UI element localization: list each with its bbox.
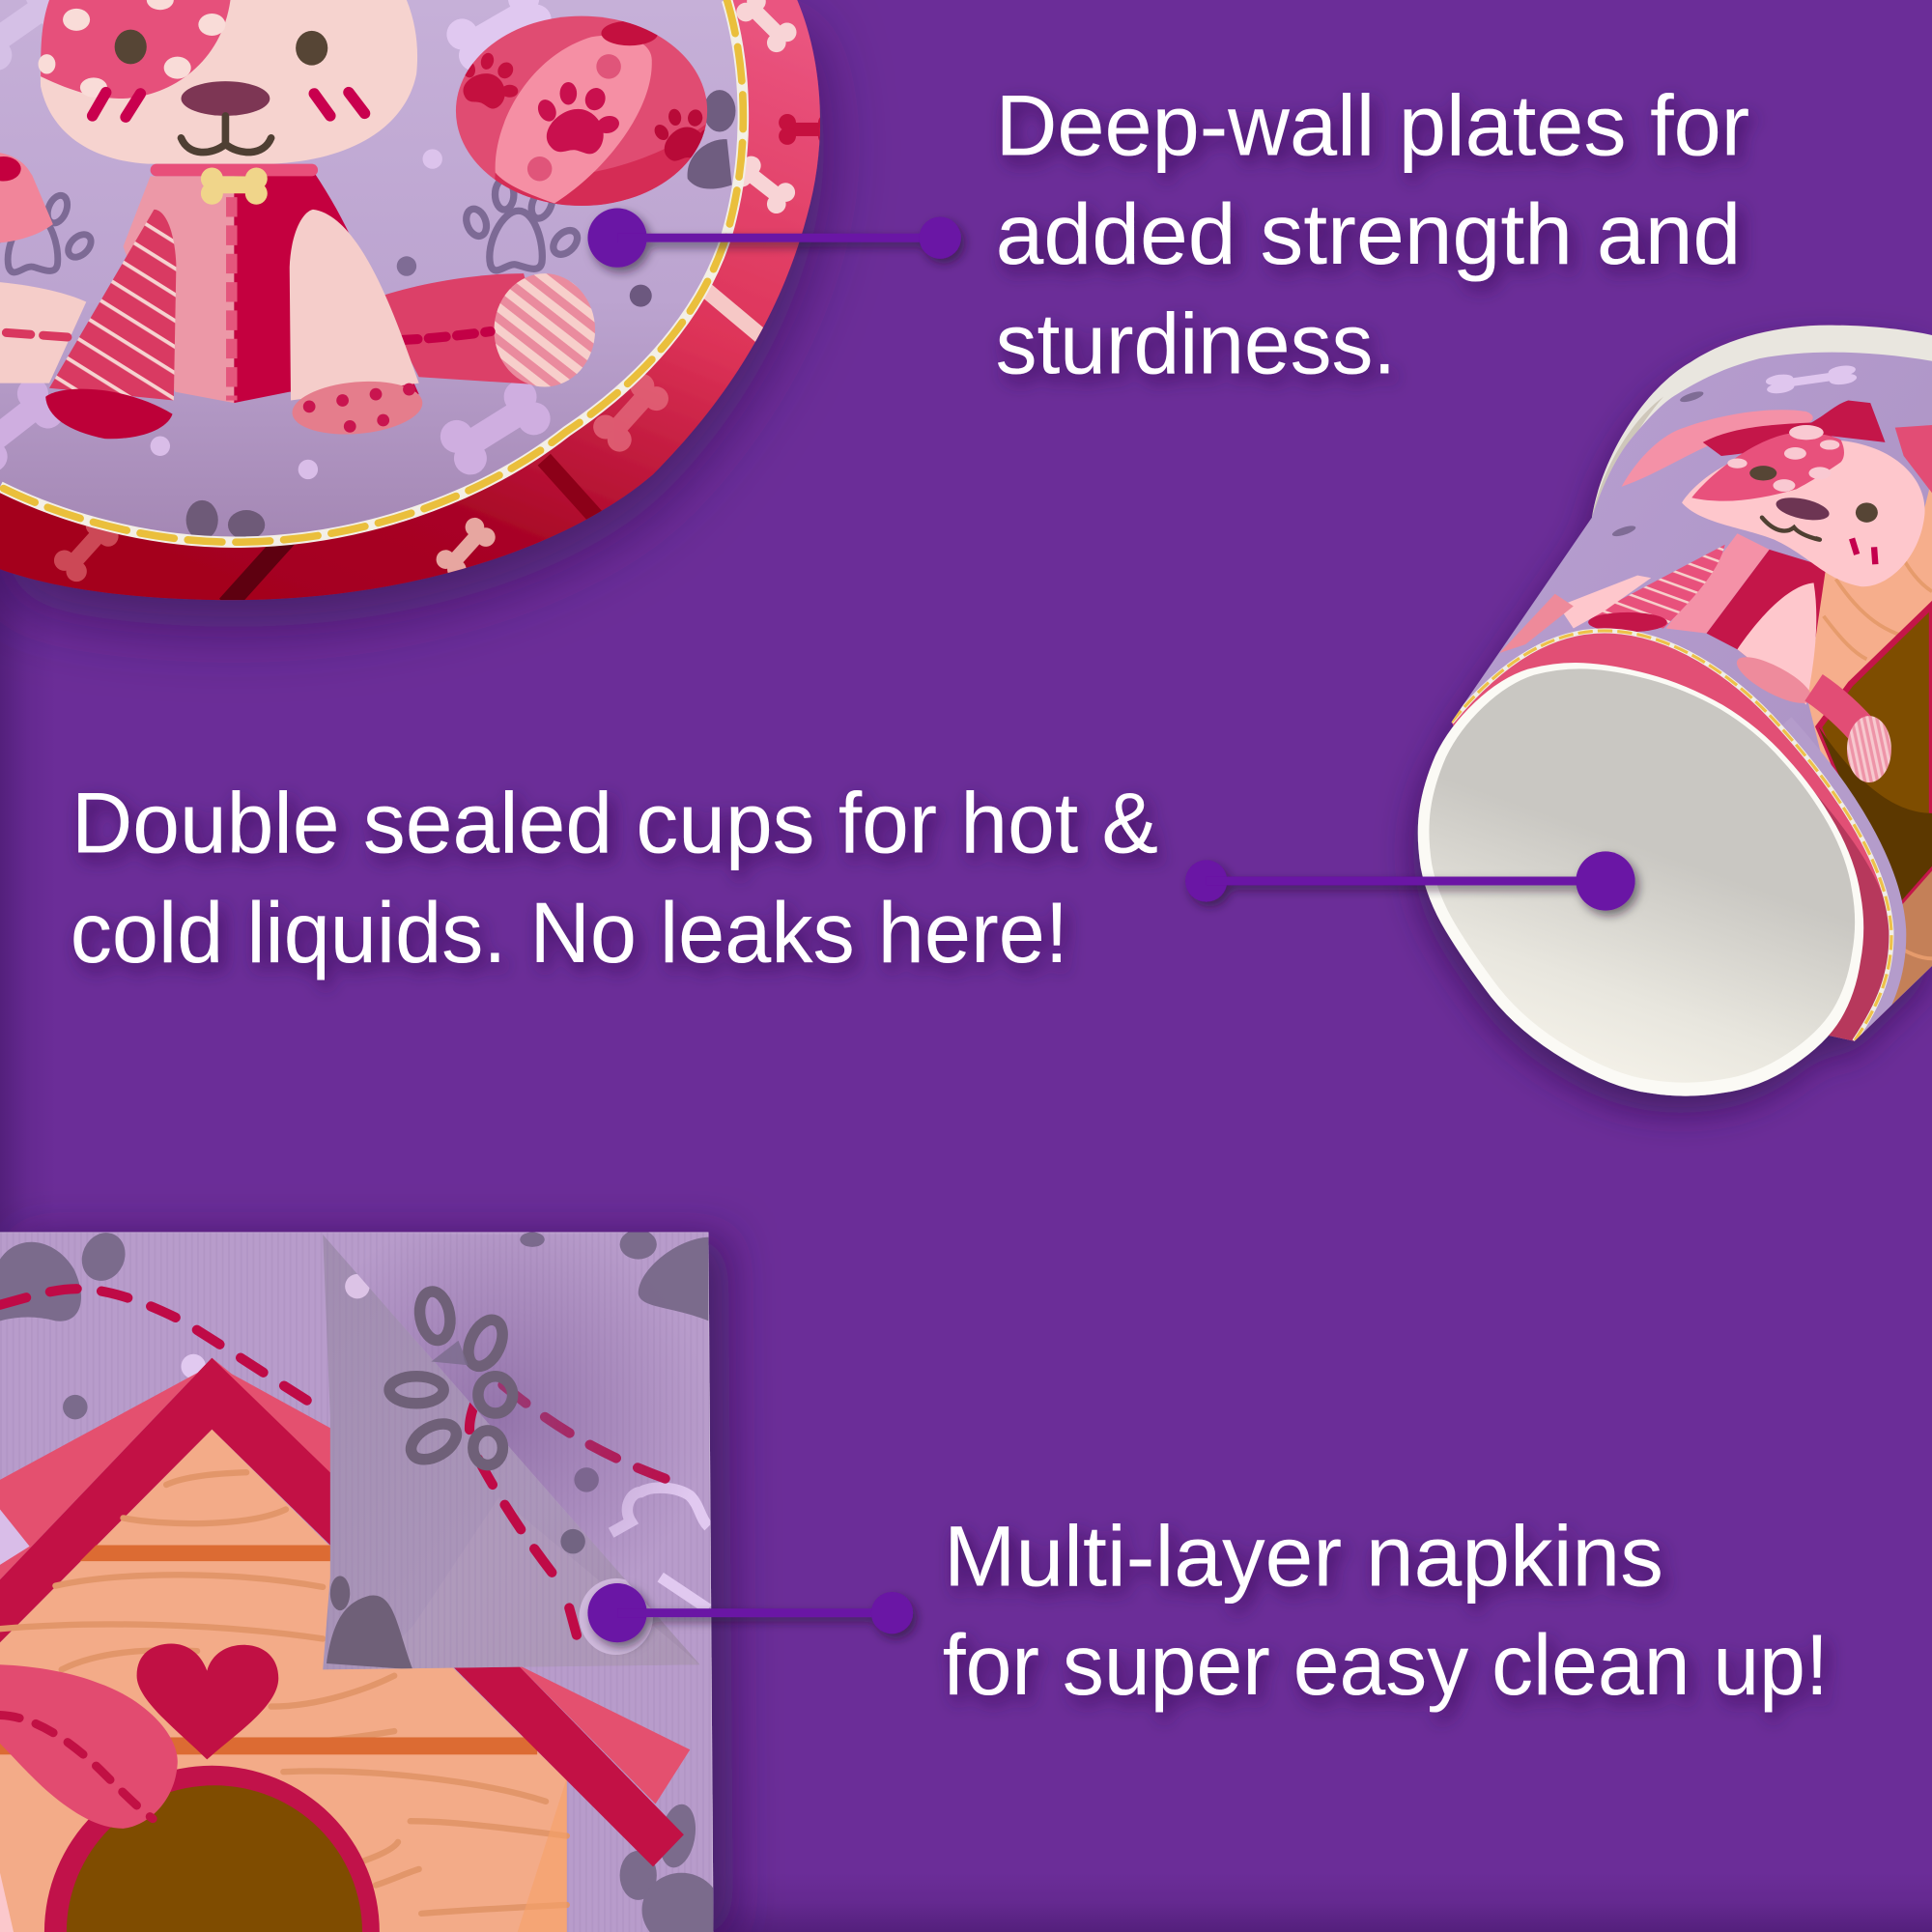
text: cups: cold liquids. No leaks here! [71, 884, 1068, 980]
connector: napkin [587, 1583, 913, 1642]
plate stitched border [0, 0, 743, 542]
text: plates: sturdiness. [996, 295, 1396, 391]
plate illustration [0, 0, 836, 611]
text: plates: Deep-wall plates for [996, 77, 1749, 174]
doghouse [0, 1358, 690, 1932]
plate ball [452, 16, 721, 210]
plate dog [0, 0, 595, 440]
connector: plate [587, 209, 961, 268]
cup door [1819, 605, 1932, 908]
connector: cup [1185, 851, 1635, 911]
napkin sheet [0, 1233, 714, 1932]
plate rim [0, 0, 820, 600]
text: plates [996, 77, 1749, 391]
napkin folded corner [314, 1233, 708, 1676]
cup illustration [1418, 326, 1932, 1096]
text: cups: Double sealed cups for hot & [71, 775, 1158, 871]
text: napkins: for super easy clean up! [943, 1616, 1829, 1713]
cup wood [1805, 478, 1932, 764]
dog head [41, 0, 417, 164]
napkin bone outline [611, 1488, 708, 1609]
text: plates: added strength and [996, 185, 1741, 282]
napkin illustration [0, 1226, 721, 1932]
text: napkins: Multi-layer napkins [944, 1508, 1663, 1605]
text: cups [71, 775, 1158, 980]
napkin paws [0, 1226, 721, 1932]
napkin fold shading [323, 1235, 708, 1664]
house grain [0, 1472, 567, 1914]
cup dog [1622, 410, 1813, 487]
cup lip [1592, 326, 1932, 529]
cup body [1452, 353, 1932, 1041]
cup band [1820, 751, 1907, 1041]
cup base [1418, 663, 1863, 1096]
napkin dashed line [0, 1289, 327, 1413]
text: napkins [943, 1508, 1829, 1713]
plate well [0, 0, 743, 542]
